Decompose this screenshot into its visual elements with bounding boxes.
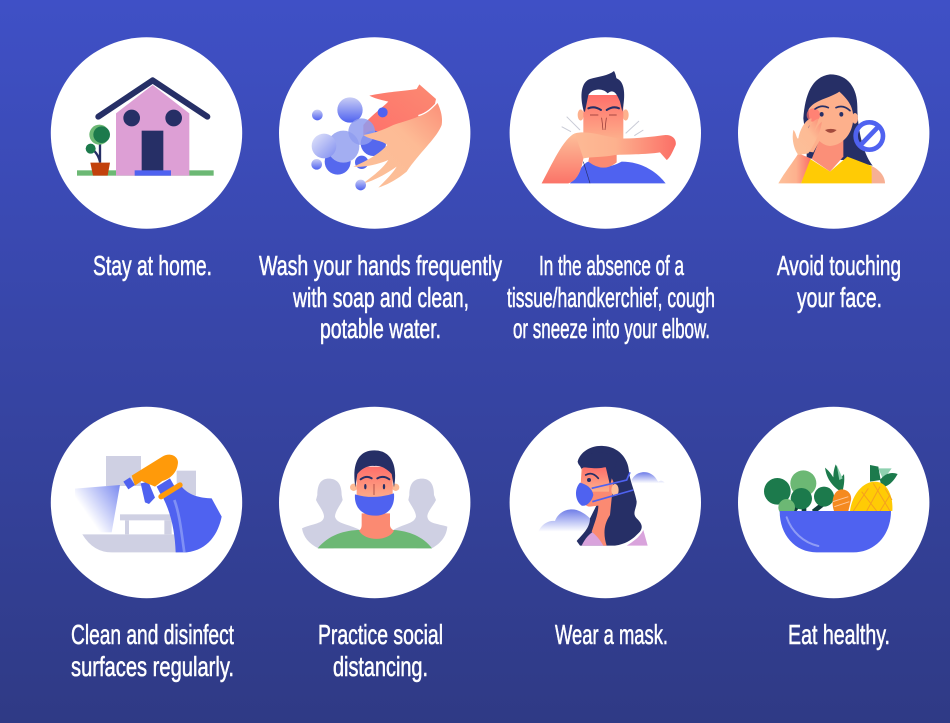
caption: potable water.	[320, 313, 441, 344]
caption: surfaces regularly.	[71, 651, 234, 682]
circle badge	[51, 407, 242, 598]
caption	[259, 250, 502, 344]
caption: Clean and disinfect	[71, 619, 234, 650]
caption: distancing.	[333, 651, 428, 682]
panel: cough into elbow	[507, 37, 715, 344]
caption: Practice social	[318, 619, 443, 650]
icon: bowl of vegetables and pineapple	[764, 464, 898, 552]
circle badge	[279, 37, 470, 229]
caption: tissue/handkerchief, cough	[507, 282, 715, 313]
icon: man in mask between silhouettes	[302, 450, 447, 548]
caption	[318, 619, 443, 682]
panel: clean and disinfect	[51, 407, 242, 682]
caption: or sneeze into your elbow.	[513, 313, 710, 344]
panel: wear a mask	[510, 407, 701, 650]
caption: In the absence of a	[539, 250, 684, 281]
caption: your face.	[797, 282, 882, 313]
circle badge	[738, 37, 929, 229]
caption: Wear a mask.	[555, 619, 668, 650]
panel: stay at home	[51, 37, 242, 281]
circle badge	[510, 37, 701, 229]
icon: man sneezing into elbow	[542, 71, 676, 183]
panel: wash hands	[259, 37, 502, 344]
icon: woman in mask with clouds	[538, 446, 665, 546]
circle badge	[738, 407, 929, 598]
panel: eat healthy	[738, 407, 929, 650]
circle badge	[51, 37, 242, 229]
caption	[71, 619, 234, 682]
panel: social distancing	[279, 407, 470, 682]
caption: with soap and clean,	[292, 282, 469, 313]
circle badge	[279, 407, 470, 598]
panel: avoid touching face	[738, 37, 929, 313]
caption: Wash your hands frequently	[259, 250, 502, 281]
icon: house with plant	[77, 80, 214, 176]
caption	[777, 250, 901, 313]
icon: spray bottle	[75, 455, 222, 552]
caption: Eat healthy.	[788, 619, 890, 650]
caption: Stay at home.	[93, 250, 212, 281]
icon: woman touching face with prohibition sign	[778, 74, 885, 183]
caption	[507, 250, 715, 344]
circle badge	[510, 407, 701, 598]
icon: hands and soap bubbles	[311, 84, 442, 190]
